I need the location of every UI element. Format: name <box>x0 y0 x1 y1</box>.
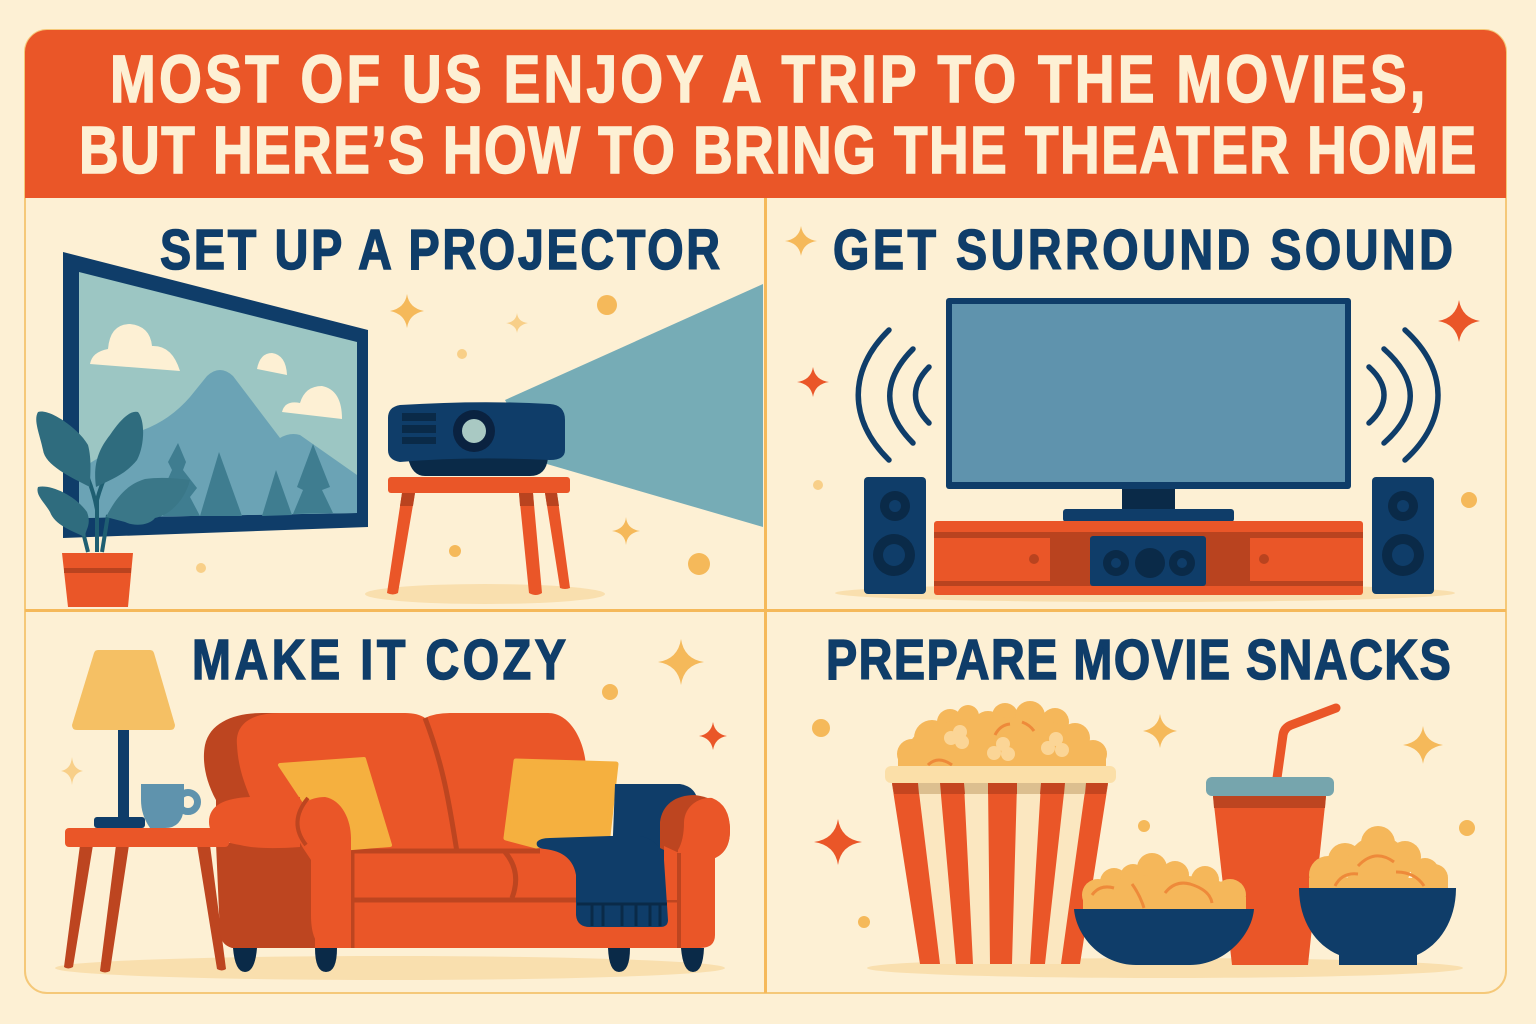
sound waves <box>858 330 1438 460</box>
right speaker <box>1372 477 1434 594</box>
projector table <box>387 477 570 595</box>
blanket front <box>537 836 668 927</box>
sparkles <box>61 639 727 785</box>
side table legs <box>64 845 226 972</box>
projector <box>388 402 565 476</box>
sofa <box>204 713 730 972</box>
projection screen <box>63 252 368 538</box>
blanket back <box>612 784 696 860</box>
pot <box>62 553 133 607</box>
popcorn bowl left <box>1074 853 1254 965</box>
media console <box>934 521 1363 595</box>
sparkles <box>196 294 710 575</box>
panel: projector <box>36 219 763 607</box>
popcorn bucket <box>885 701 1116 964</box>
title: MOST OF US ENJOY A TRIP TO THE MOVIES, <box>110 42 1425 116</box>
projector beam <box>505 284 763 527</box>
right cushion <box>506 761 616 846</box>
sofa legs <box>233 948 704 972</box>
panel dividers <box>25 198 1506 993</box>
heading: snacks: PREPARE MOVIE SNACKS <box>826 629 1451 692</box>
plant <box>36 412 190 607</box>
sparkles <box>812 714 1475 928</box>
shadow <box>867 958 1463 978</box>
drink cup <box>1206 708 1336 965</box>
sparkles <box>785 226 1480 508</box>
television <box>946 298 1351 522</box>
panel: surround sound <box>785 219 1480 602</box>
popcorn bowl right <box>1299 826 1456 965</box>
lamp <box>72 650 175 828</box>
shadow <box>365 584 605 604</box>
heading: projector: SET UP A PROJECTOR <box>160 219 720 282</box>
left arm <box>209 797 300 848</box>
clouds <box>90 324 180 371</box>
title banner <box>25 30 1506 198</box>
right arm <box>660 795 730 858</box>
shadow <box>55 956 725 980</box>
title: BUT HERE’S HOW TO BRING THE THEATER HOME <box>79 113 1476 187</box>
heading: cozy: MAKE IT COZY <box>192 629 566 692</box>
left speaker <box>864 477 926 594</box>
popcorn <box>897 701 1107 773</box>
shadow <box>835 584 1455 602</box>
panel: cozy <box>55 629 730 980</box>
side table top <box>65 828 229 847</box>
mug <box>141 784 198 828</box>
left cushion <box>280 759 390 849</box>
heading: surround sound: GET SURROUND SOUND <box>833 219 1453 282</box>
panel: snacks <box>812 629 1475 978</box>
title <box>79 42 1476 187</box>
